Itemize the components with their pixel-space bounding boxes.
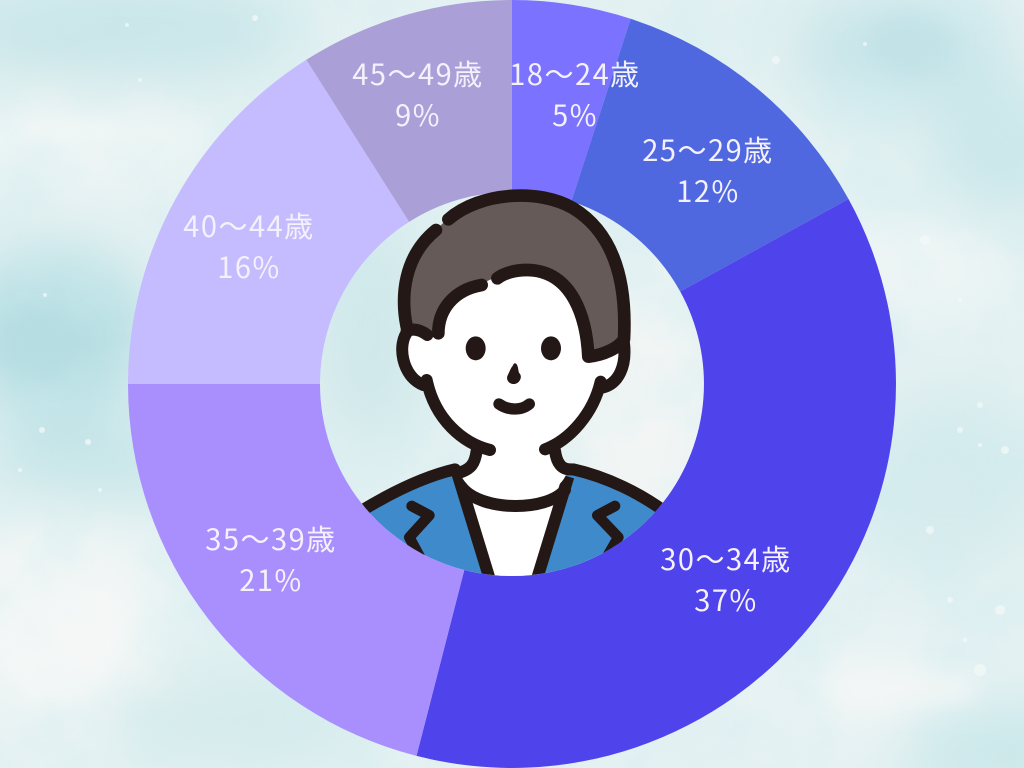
label: 35-39 xyxy=(205,517,337,600)
label: 25-29 xyxy=(642,128,774,211)
label: 18-24 xyxy=(509,52,641,135)
nose xyxy=(507,363,521,384)
label: 30-34 xyxy=(660,537,792,620)
neck xyxy=(460,443,567,500)
label: 40-44 xyxy=(183,204,315,287)
label: 40-44: 16% xyxy=(217,245,281,287)
label: 25-29: 12% xyxy=(676,169,740,211)
segment: 30-34 37% xyxy=(416,199,896,768)
face xyxy=(402,273,624,450)
jacket and shirt xyxy=(360,469,665,580)
segment: 25-29 12% xyxy=(571,19,848,292)
label: 35-39: 35〜39歳 xyxy=(205,517,337,559)
eyes xyxy=(466,336,486,360)
label: 30-34: 30〜34歳 xyxy=(660,537,792,579)
icon: person avatar xyxy=(360,196,665,580)
label: 18-24: 18〜24歳 xyxy=(509,52,641,94)
label: 45-49: 45〜49歳 xyxy=(352,52,484,94)
segment: 45-49 9% xyxy=(306,0,512,222)
donut chart xyxy=(128,0,896,768)
label: 35-39: 21% xyxy=(239,558,303,600)
label: 30-34: 37% xyxy=(694,578,758,620)
ears and jaw outline xyxy=(402,331,423,385)
label: 25-29: 25〜29歳 xyxy=(642,128,774,170)
label: 18-24: 5% xyxy=(552,93,598,135)
segment: 35-39 21% xyxy=(128,384,464,756)
label: 45-49 xyxy=(352,52,484,135)
label: 40-44: 40〜44歳 xyxy=(183,204,315,246)
segment: 18-24 5% xyxy=(512,0,631,201)
mouth xyxy=(499,404,529,409)
label: 45-49: 9% xyxy=(395,93,441,135)
segment: 40-44 16% xyxy=(128,60,409,384)
hair xyxy=(405,197,625,357)
